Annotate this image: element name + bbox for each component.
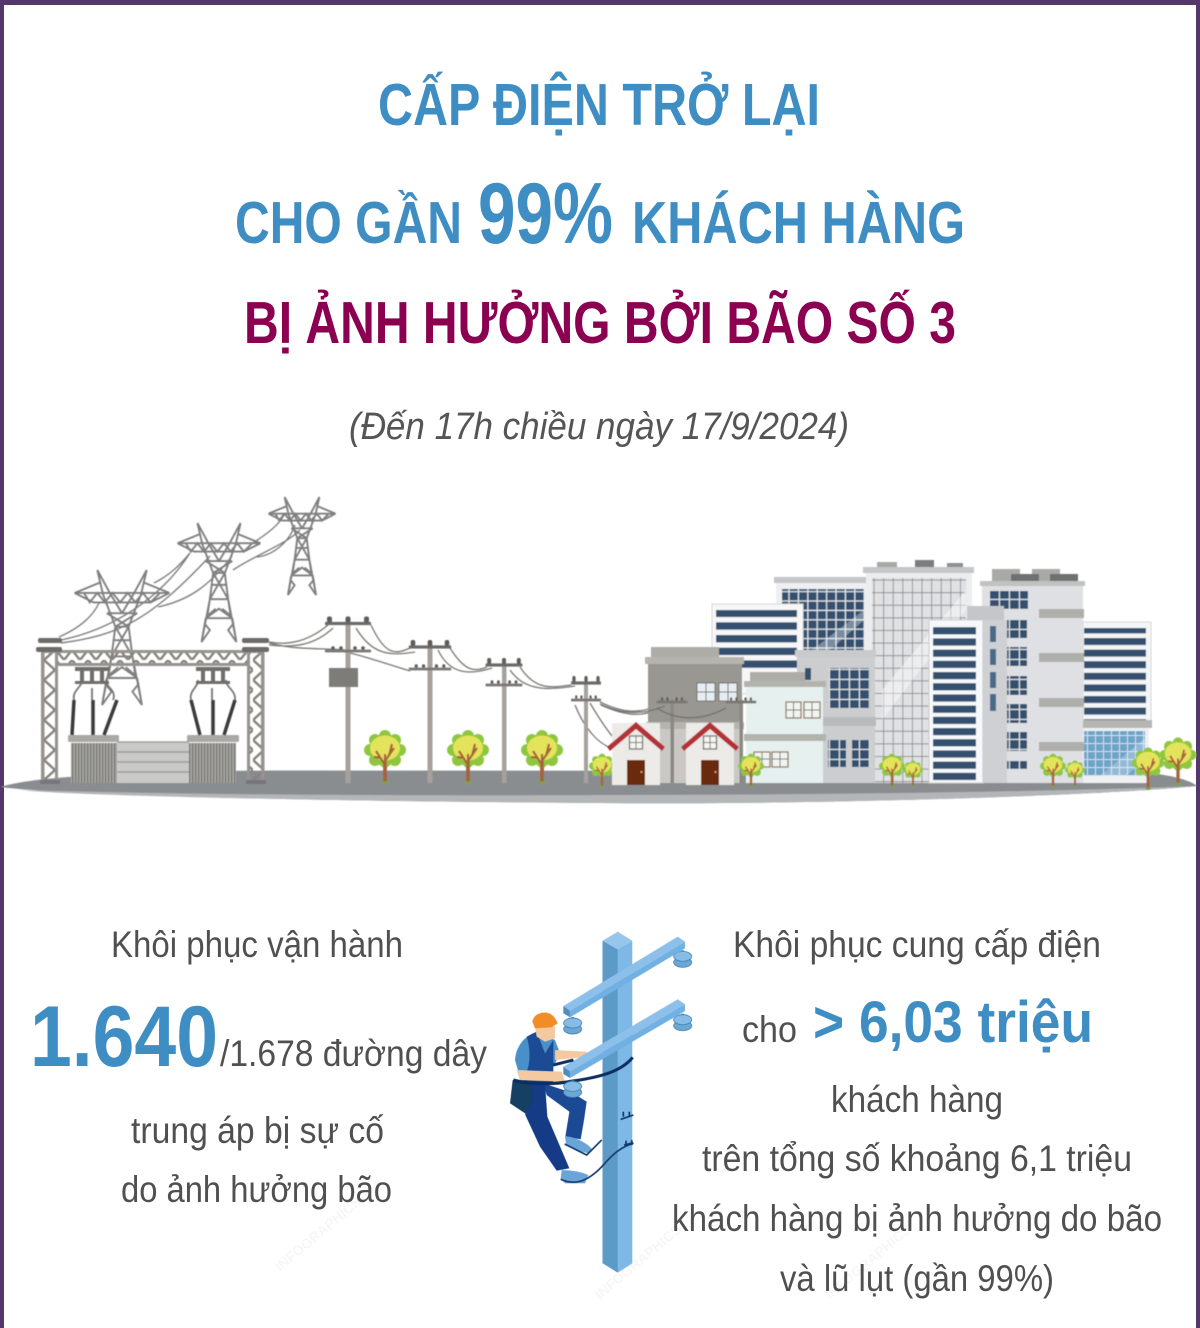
head and helmet <box>535 1027 555 1042</box>
poles in front of city <box>600 697 756 783</box>
pole 4 <box>571 676 601 783</box>
belt <box>513 1080 570 1083</box>
left description 1: trung áp bị sự cố <box>131 1110 384 1151</box>
white front tower <box>929 620 1007 783</box>
white striped block <box>712 604 803 694</box>
pole 1 with transformer <box>325 616 371 783</box>
lineman safety strap <box>553 1057 633 1082</box>
title block <box>235 71 965 356</box>
utility poles <box>325 616 601 783</box>
right description 1: khách hàng <box>831 1079 1003 1120</box>
watermarks: INFOGRAPHICS <box>592 1221 684 1302</box>
pole <box>603 932 632 1273</box>
left description 2: do ảnh hưởng bão <box>121 1169 392 1210</box>
icon: worker climbing pole <box>510 932 692 1273</box>
title line 2: 99% <box>478 166 613 262</box>
title line 2: CHO GẦN <box>235 190 462 256</box>
control box <box>117 742 189 783</box>
tower middle <box>178 523 260 642</box>
light gray block <box>795 650 876 783</box>
right statistic <box>672 924 1162 1299</box>
dark gray building <box>645 647 744 783</box>
watermarks <box>272 1193 914 1302</box>
trees right <box>738 737 1196 790</box>
pole 2 <box>409 640 451 783</box>
left statistic <box>30 924 487 1210</box>
tower far <box>268 497 336 595</box>
title line 3: BỊ ẢNH HƯỞNG BỞI BÃO SỐ 3 <box>244 289 956 356</box>
title line 2: KHÁCH HÀNG <box>632 190 965 256</box>
watermarks: INFOGRAPHICS <box>822 1221 914 1302</box>
trees left <box>364 730 615 787</box>
number 6,03 million: > 6,03 triệu <box>813 990 1093 1055</box>
pale green building <box>744 672 826 783</box>
back leg <box>543 1083 587 1139</box>
arms <box>555 1050 588 1060</box>
title line 1: CẤP ĐIỆN TRỞ LẠI <box>378 71 820 138</box>
high voltage towers <box>59 497 336 705</box>
front leg <box>523 1083 569 1171</box>
gray slab <box>967 606 1004 783</box>
house left <box>607 722 665 785</box>
subtitle date: (Đến 17h chiều ngày 17/9/2024) <box>349 406 849 448</box>
right office tower <box>980 569 1085 783</box>
shirt and overalls <box>515 1032 560 1077</box>
label cho: cho <box>742 1009 797 1050</box>
worker <box>510 1012 633 1183</box>
high voltage wires <box>59 513 300 643</box>
tool bag <box>510 1080 533 1113</box>
pole 3 <box>486 658 522 783</box>
substation <box>36 638 269 784</box>
ground <box>0 770 1197 803</box>
distribution wires <box>269 625 730 748</box>
frame <box>36 638 269 784</box>
insulators <box>674 950 692 967</box>
climbing spikes <box>621 1112 633 1147</box>
watermarks: INFOGRAPHICS <box>272 1193 364 1274</box>
right description 4: và lũ lụt (gần 99%) <box>780 1258 1054 1299</box>
tower near <box>74 570 170 705</box>
lower cross arm <box>563 999 685 1078</box>
illustration: grid to city <box>0 497 1197 803</box>
house right <box>681 722 739 785</box>
city buildings <box>600 560 1152 785</box>
title line 2 <box>235 166 965 262</box>
lower left insulator <box>564 1080 582 1097</box>
far right striped block <box>1083 622 1152 783</box>
transformer right <box>187 667 239 783</box>
upper cross arm <box>563 937 685 1017</box>
right heading: Khôi phục cung cấp điện <box>733 924 1101 965</box>
number total lines: /1.678 đường dây <box>220 1033 487 1074</box>
number 1.640: 1.640 <box>30 989 218 1085</box>
transformer left <box>68 667 119 783</box>
left heading: Khôi phục vận hành <box>111 924 403 965</box>
glass office <box>774 577 866 663</box>
tall grid tower <box>863 560 974 783</box>
right description 2: trên tổng số khoảng 6,1 triệu <box>702 1138 1132 1179</box>
